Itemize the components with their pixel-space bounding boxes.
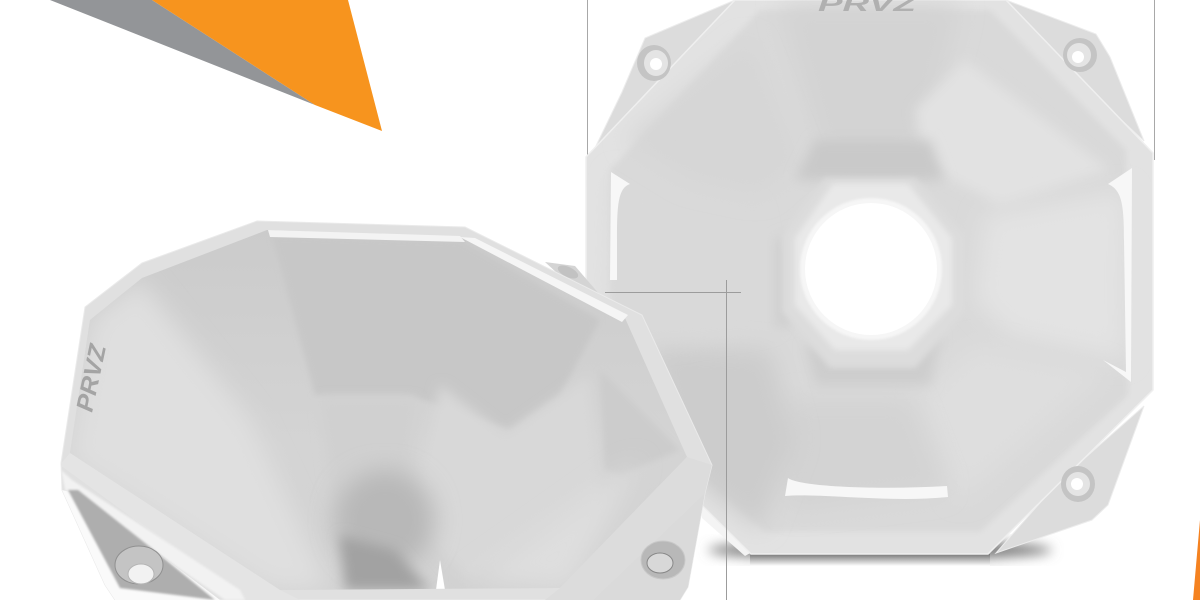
horn body (586, 0, 1153, 554)
mid light facets (320, 400, 415, 560)
mounting tabs (594, 0, 1144, 553)
screw left (115, 546, 163, 584)
front flange (60, 453, 712, 600)
flange band left (60, 453, 300, 600)
mounting hole top left (637, 45, 671, 81)
flange band right (545, 457, 712, 600)
thin vertical guide lines (588, 0, 1154, 160)
decorative gray triangle (50, 0, 315, 105)
screw right (641, 541, 685, 579)
deep throat shadow (335, 470, 435, 570)
mounting hole top right (1063, 38, 1097, 72)
throat shadows (795, 140, 945, 180)
rim highlights (610, 168, 1132, 499)
screw tab left (62, 490, 220, 600)
callout guide lines (605, 280, 741, 600)
rear tabs (130, 243, 600, 295)
hub ring (782, 178, 965, 368)
upper grey face (302, 326, 590, 426)
mounting hole bottom right (1061, 466, 1095, 502)
left light face (79, 288, 316, 586)
floor shadow (708, 540, 1052, 566)
lower left tab strip (700, 495, 752, 556)
rim gloss (268, 230, 465, 242)
outer rim (61, 221, 712, 600)
left horn: angled view (60, 221, 712, 600)
central hole (800, 198, 942, 340)
right horn: front view (586, 0, 1153, 566)
inner faces (610, 5, 1128, 532)
decorative orange triangle (152, 0, 382, 131)
inner cone (70, 230, 687, 590)
embossed logo left: PRVZ (71, 341, 112, 414)
orange corner accent (1193, 520, 1200, 600)
